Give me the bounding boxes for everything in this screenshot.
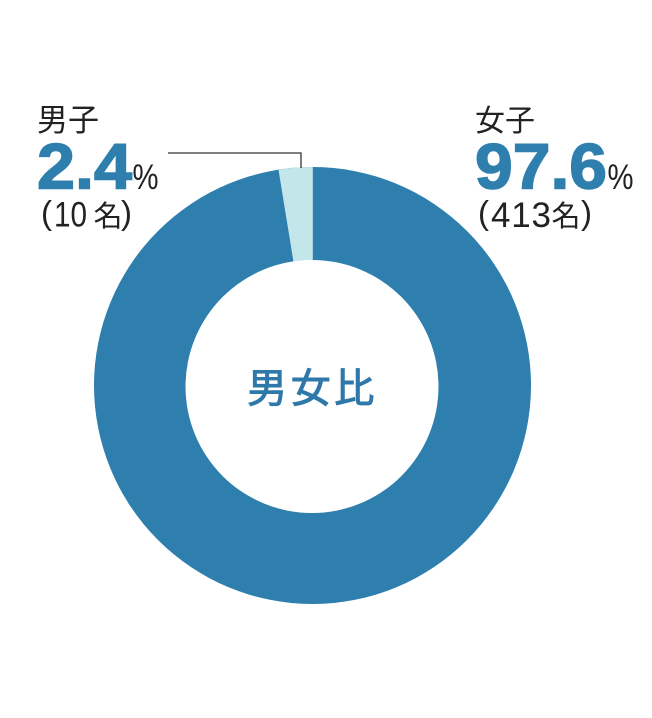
female count: 413 (491, 196, 551, 235)
male count: 10 (54, 196, 87, 234)
label: male (37, 103, 158, 234)
center label: 男女比 (247, 367, 378, 411)
female count (478, 194, 592, 235)
female count: ) (581, 194, 592, 231)
donut chart (94, 167, 531, 604)
donut hole (186, 260, 438, 513)
male count: ( (41, 194, 52, 231)
male count: ) (121, 194, 132, 231)
female percentage: 97.6 (475, 130, 607, 202)
female count: ( (478, 194, 489, 231)
segment: female 97.6% (94, 167, 531, 604)
female heading: 女子 (475, 105, 535, 138)
segment: male 2.4% (278, 167, 313, 262)
male percentage: 2.4 (37, 130, 132, 202)
male heading: 男子 (37, 103, 99, 138)
female count: 名 (552, 200, 581, 233)
label: female (475, 105, 634, 235)
leader line (168, 153, 301, 168)
male count: 名 (94, 200, 123, 233)
male percent sign: % (132, 158, 158, 197)
male count (41, 194, 132, 234)
female percent sign: % (608, 158, 634, 197)
